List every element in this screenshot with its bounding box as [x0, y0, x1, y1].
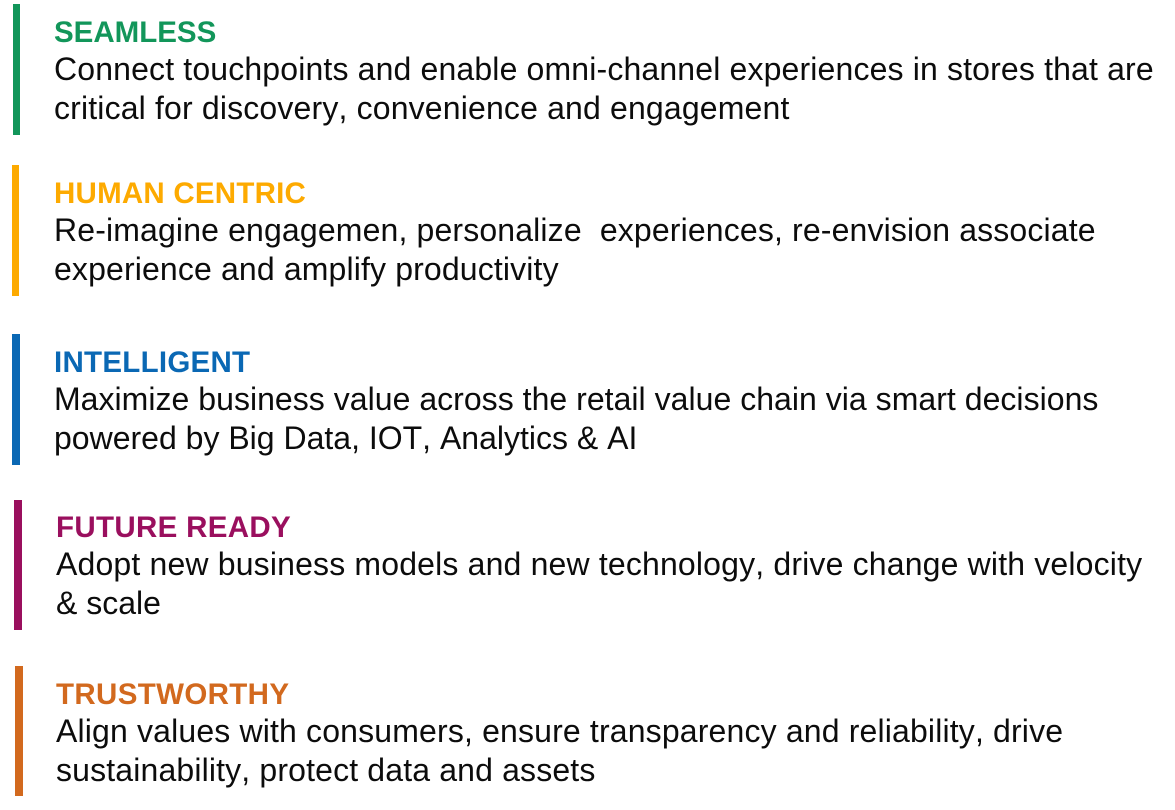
text: seamless description: critical for discovery, convenience and engagement [54, 90, 790, 126]
accent bar: human centric [12, 165, 19, 296]
accent bar: seamless [12, 4, 20, 135]
panel: trustworthy [15, 666, 1063, 796]
heading: seamless: SEAMLESS [54, 16, 216, 49]
heading: intelligent: INTELLIGENT [54, 346, 250, 379]
panel: human centric [12, 165, 1096, 296]
panel: intelligent [12, 334, 1098, 465]
text: trustworthy description: Align values with consumers, ensure transparency and reliability, drive [56, 713, 1063, 749]
text: seamless description [54, 51, 1154, 126]
heading: human centric: HUMAN CENTRIC [54, 177, 306, 210]
text: future ready description [56, 546, 1142, 620]
accent bar: future ready [14, 500, 22, 630]
text: human centric description: Re-imagine engagemen, personalize experiences, re-envision associate [54, 212, 1096, 248]
text: trustworthy description: sustainability, protect data and assets [56, 752, 596, 788]
text: future ready description: & scale [56, 584, 161, 620]
panel: seamless [13, 4, 1154, 135]
accent bar: trustworthy [15, 666, 22, 796]
text: intelligent description: Maximize business value across the retail value chain via smart decisions [54, 381, 1098, 417]
text: intelligent description [54, 381, 1098, 456]
heading: trustworthy: TRUSTWORTHY [56, 678, 289, 711]
text: intelligent description: powered by Big Data, IOT, Analytics & AI [54, 420, 637, 456]
text: human centric description [54, 212, 1096, 286]
heading: future ready: FUTURE READY [56, 511, 291, 544]
panel: future ready [14, 500, 1142, 630]
text: trustworthy description [56, 713, 1063, 788]
text: human centric description: experience and amplify productivity [54, 250, 559, 286]
text: future ready description: Adopt new business models and new technology, drive change with velocity [56, 546, 1142, 582]
text: seamless description: Connect touchpoints and enable omni-channel experiences in stores that are [54, 51, 1154, 87]
accent bar: intelligent [12, 334, 20, 465]
